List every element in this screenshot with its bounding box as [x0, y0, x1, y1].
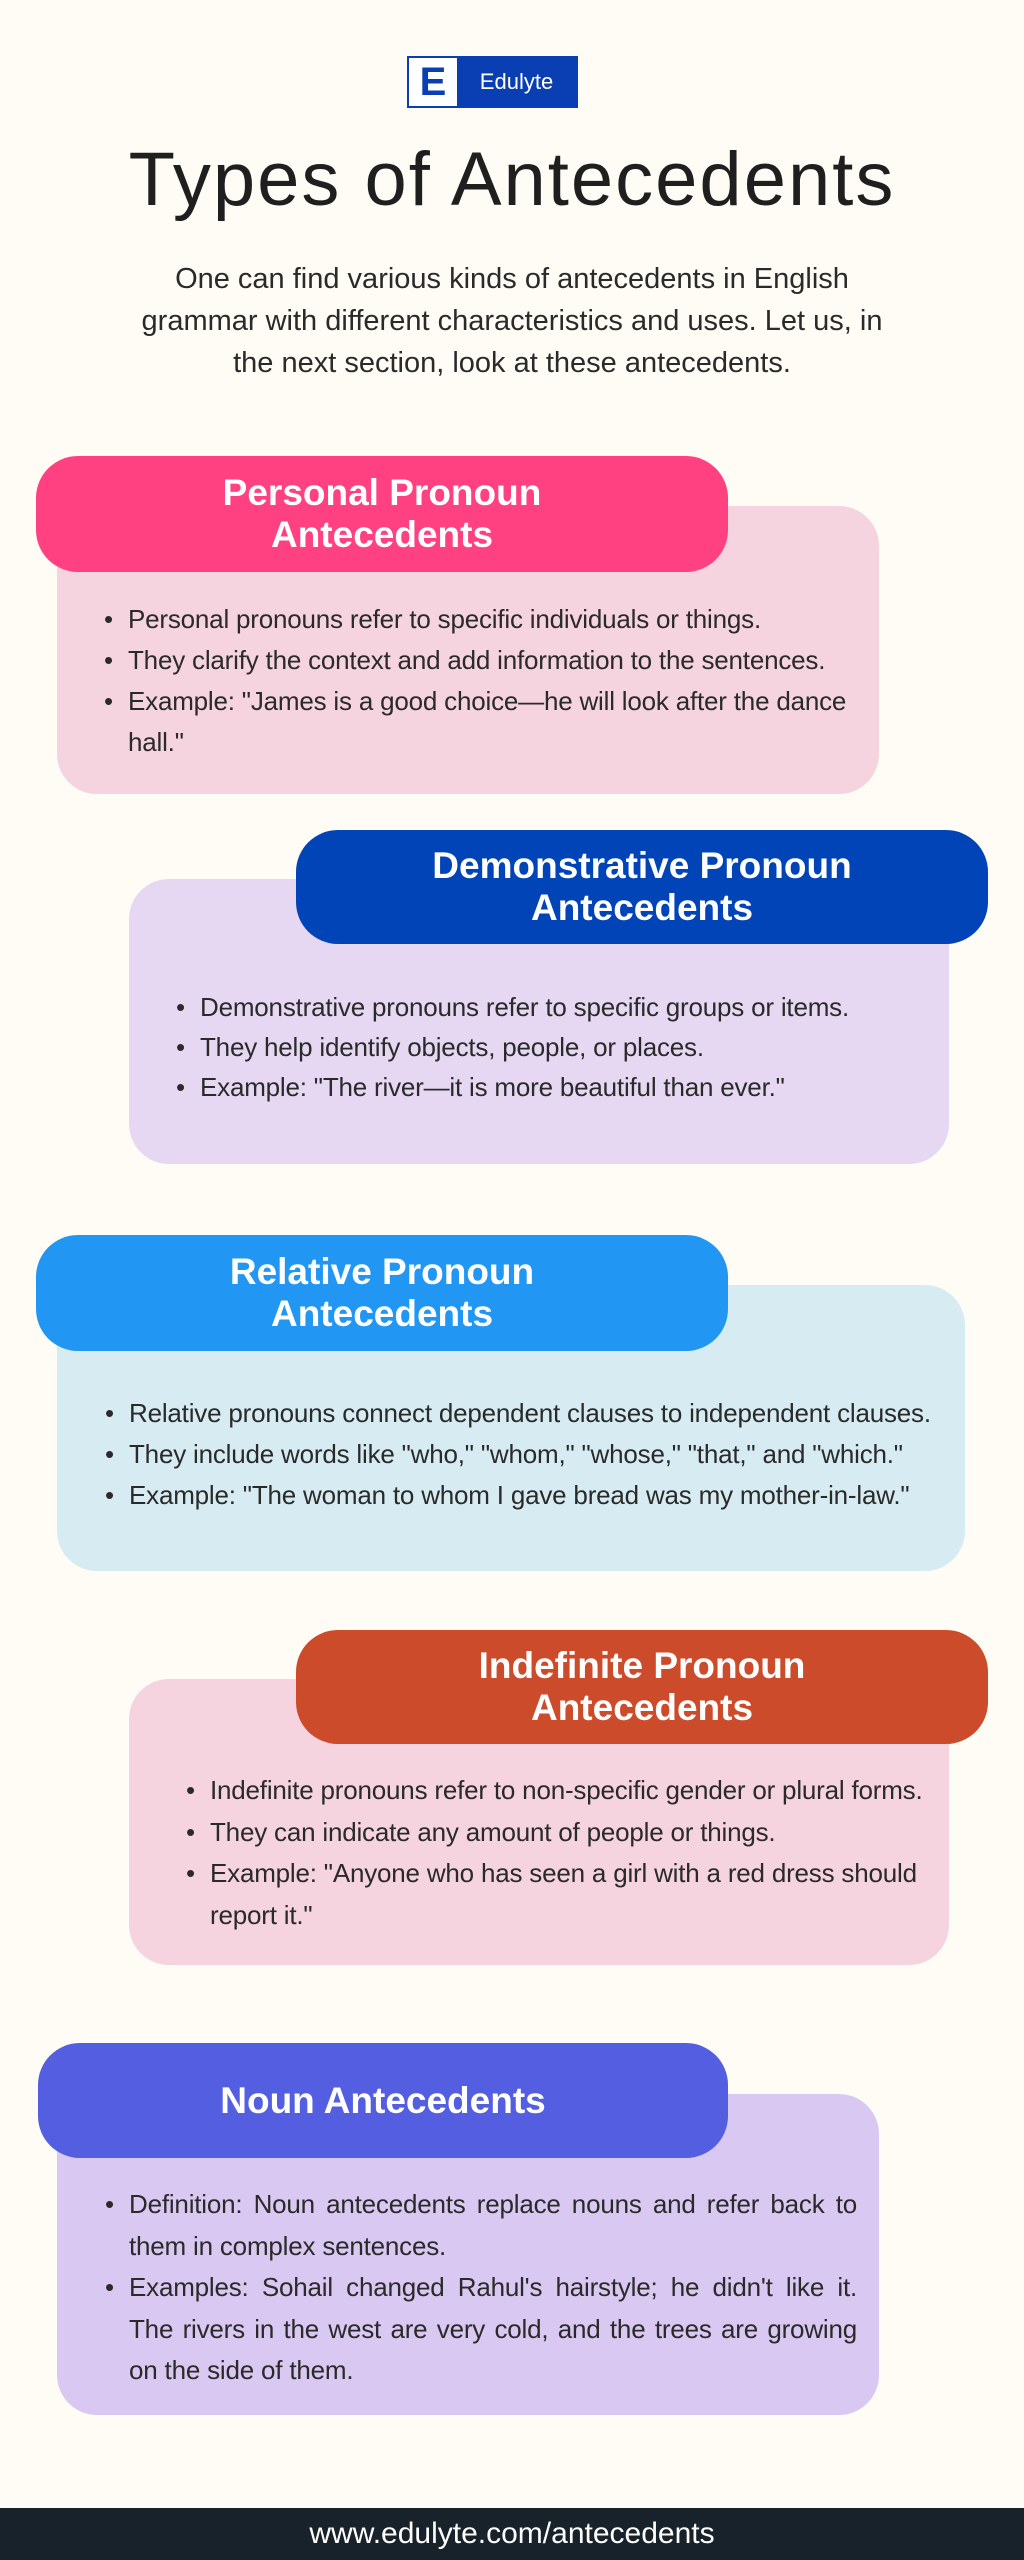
heading: demonstrative: Demonstrative Pronoun [432, 845, 852, 886]
footer [0, 2508, 1024, 2560]
text: indefinite: Example: "Anyone who has seen a girl with a red dress should report it." [210, 1858, 917, 1930]
text: personal: Personal pronouns refer to specific individuals or things. [128, 604, 761, 634]
heading: indefinite [296, 1630, 988, 1744]
logo: Edulyte [480, 69, 553, 94]
heading: noun [38, 2043, 728, 2158]
text: indefinite [187, 1775, 922, 1930]
heading: demonstrative: Antecedents [531, 887, 753, 928]
heading: relative: Relative Pronoun [230, 1251, 534, 1292]
logo [407, 56, 578, 108]
panel: relative [36, 1235, 965, 1571]
text: noun: Definition: Noun antecedents replace nouns and refer back to them in complex sentences. [129, 2189, 857, 2260]
text: noun [106, 2189, 857, 2385]
text: demonstrative: Demonstrative pronouns refer to specific groups or items. [200, 992, 849, 1022]
text: personal [105, 604, 846, 757]
panel: demonstrative [129, 830, 988, 1164]
title: Types of Antecedents [129, 137, 895, 222]
text: demonstrative: Example: "The river—it is more beautiful than ever." [200, 1072, 785, 1102]
heading: indefinite: Indefinite Pronoun [479, 1645, 805, 1686]
text: demonstrative: They help identify objects, people, or places. [200, 1032, 704, 1062]
heading: personal [36, 456, 728, 572]
heading: relative [36, 1235, 728, 1351]
text: demonstrative [177, 992, 849, 1102]
text: relative: Relative pronouns connect dependent clauses to independent clauses. [129, 1398, 931, 1428]
panel: indefinite [129, 1630, 988, 1965]
heading: personal: Personal Pronoun [223, 472, 541, 513]
heading: demonstrative [296, 830, 988, 944]
text: relative [106, 1398, 931, 1510]
text: indefinite: They can indicate any amount of people or things. [210, 1816, 775, 1846]
footer: www.edulyte.com/antecedents [309, 2517, 715, 2550]
heading: relative: Antecedents [271, 1293, 493, 1334]
icon: logo mark [409, 58, 457, 106]
icon: logo mark: E [420, 60, 446, 104]
text: relative: Example: "The woman to whom I gave bread was my mother-in-law." [129, 1480, 909, 1510]
heading: noun: Noun Antecedents [220, 2080, 546, 2120]
heading: personal: Antecedents [271, 514, 493, 555]
text: relative: They include words like "who," "whom," "whose," "that," and "which." [129, 1439, 903, 1469]
intro text: One can find various kinds of antecedents in English grammar with different characteristics and uses. Let us, in the next section, look at these antecedents. [142, 263, 882, 379]
panel: noun [38, 2043, 879, 2415]
text: noun: Examples: Sohail changed Rahul's hairstyle; he didn't like it. The rivers in the west are very cold, and the trees are growing on the side of them. [129, 2272, 857, 2385]
text: personal: Example: "James is a good choice—he will look after the dance hall." [128, 686, 846, 757]
heading: indefinite: Antecedents [531, 1687, 753, 1728]
text: personal: They clarify the context and add information to the sentences. [128, 645, 825, 675]
panel: personal [36, 456, 879, 794]
text: indefinite: Indefinite pronouns refer to non-specific gender or plural forms. [210, 1775, 922, 1805]
